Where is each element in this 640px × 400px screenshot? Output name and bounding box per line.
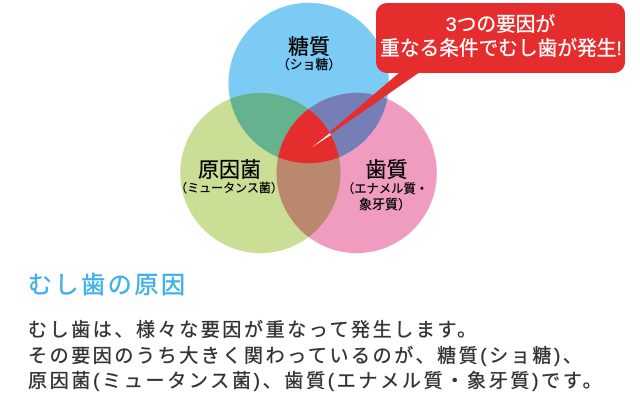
overlap: bacteria and tooth: [276, 109, 341, 237]
callout text: 重なる条件でむし歯が発生!: [380, 38, 622, 60]
callout: [311, 3, 625, 148]
circle: tooth: [276, 93, 437, 253]
label: tooth: 歯質: [366, 159, 408, 182]
overlap: sugar and bacteria: [230, 92, 308, 158]
body text: むし歯は、様々な要因が重なって発生します。: [28, 319, 479, 341]
circle: bacteria: [180, 93, 341, 253]
venn diagram: [180, 3, 437, 253]
callout text: 3つの要因が: [446, 14, 556, 36]
overlap: sugar and tooth: [296, 92, 388, 158]
body text: その要因のうち大きく関わっているのが、糖質(ショ糖)、: [28, 345, 585, 367]
label: bacteria: 原因菌: [198, 159, 261, 182]
body text: 原因菌(ミュータンス菌)、歯質(エナメル質・象牙質)です。: [28, 370, 604, 392]
label: tooth: 象牙質）: [359, 197, 411, 212]
circle: sugar: [228, 3, 389, 163]
label: sugar: 糖質: [288, 36, 330, 59]
overlap: all three: [278, 109, 339, 164]
heading: むし歯の原因: [28, 272, 188, 299]
label: bacteria: （ミュータンス菌）: [175, 181, 283, 195]
callout tail highlight: [311, 133, 331, 148]
label: tooth: （エナメル質・: [342, 181, 428, 196]
callout box: [376, 3, 625, 73]
label: sugar: （ショ糖）: [277, 57, 341, 72]
callout tail: [311, 72, 420, 148]
